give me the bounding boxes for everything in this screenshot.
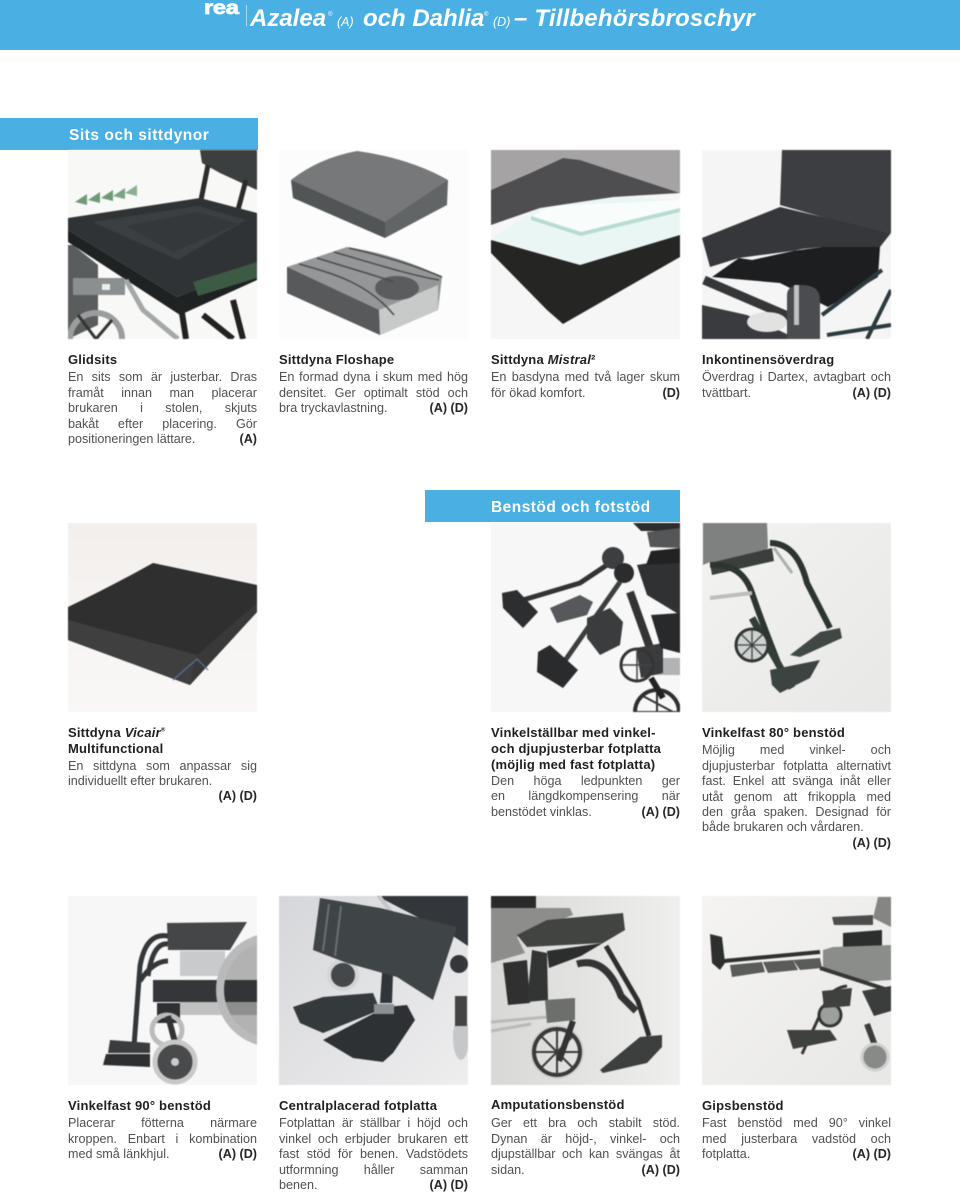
description: (D)	[663, 386, 680, 400]
description: utåt genom att frikoppla med	[702, 790, 891, 804]
photo: 90 degree legrest	[102, 921, 258, 1085]
description: både brukaren och vårdaren.	[702, 820, 864, 834]
description: (A) (D)	[430, 401, 468, 415]
description: utformning håller samman	[279, 1163, 468, 1177]
description	[702, 743, 891, 850]
description: bakåt efter placering. Gör	[68, 417, 257, 431]
title: ®	[328, 12, 332, 18]
panel: Gipsbenstöd	[702, 896, 892, 1161]
title: (D)	[493, 15, 510, 29]
photo: foam cushions	[286, 150, 449, 336]
description: för ökad komfort.	[491, 386, 586, 400]
description: fast stöd för benen. Vadstödets	[279, 1147, 468, 1161]
description: Möjlig med vinkel- och	[702, 743, 891, 757]
heading: Inkontinensöverdrag	[702, 352, 834, 367]
photo: dark cushion	[67, 523, 258, 708]
heading: Sittdyna Floshape	[279, 352, 394, 367]
heading line 3: (möjlig med fast fotplatta)	[491, 757, 655, 772]
photo: 80 degree legrest	[702, 522, 891, 712]
description: djupjusterbar fotplatta alternativt	[702, 759, 891, 773]
panel: Glidsits	[67, 149, 258, 446]
title: (A)	[337, 15, 354, 29]
panel: Sittdyna Mistral	[490, 150, 681, 400]
description: kroppen. Enbart i kombination	[68, 1132, 257, 1146]
header band	[0, 0, 960, 50]
heading: Amputationsbenstöd	[491, 1097, 625, 1112]
photo: central footplate	[278, 895, 469, 1086]
description: (A) (D)	[219, 1147, 257, 1161]
description: (A) (D)	[642, 805, 680, 819]
heading: Sittdyna Vicair®	[68, 725, 165, 740]
panel: Sittdyna Vicair	[67, 523, 258, 803]
section heading: Sits och sittdynor: Sits och sittdynor	[69, 127, 209, 144]
description: En sits som är justerbar. Dras	[68, 370, 257, 384]
description: en längdkompensering när	[491, 789, 680, 803]
heading: Glidsits	[68, 352, 117, 367]
section heading: Benstöd och fotstöd	[425, 490, 680, 522]
heading: Vinkelfast 80° benstöd	[702, 725, 845, 740]
photo: amputation support	[490, 895, 680, 1086]
description: En formad dyna i skum med hög	[279, 370, 468, 384]
description	[279, 370, 468, 415]
description: brukaren i stolen, skjuts	[68, 401, 257, 415]
description	[702, 370, 891, 400]
title	[250, 5, 756, 32]
description: benen.	[279, 1178, 318, 1192]
description: med justerbara vadstöd och	[702, 1132, 891, 1146]
title: Azalea	[250, 5, 326, 32]
title: och Dahlia	[363, 5, 484, 32]
logo divider	[246, 5, 247, 26]
heading: Vinkelfast 90° benstöd	[68, 1098, 211, 1113]
description: individuellt efter brukaren.	[68, 774, 212, 788]
description: (A)	[240, 432, 257, 446]
photo: sliding seat	[67, 149, 258, 340]
panel: Sittdyna Floshape	[279, 150, 468, 415]
title: – Tillbehörsbroschyr	[514, 5, 755, 32]
description	[68, 759, 257, 803]
section heading: Sits och sittdynor	[0, 118, 258, 150]
description	[491, 1116, 680, 1177]
panel: Amputationsbenstöd	[490, 895, 680, 1177]
description: En sittdyna som anpassar sig	[68, 759, 257, 773]
description: tvättbart.	[702, 386, 751, 400]
description: Fotplattan är ställbar i höjd och	[279, 1116, 468, 1130]
description: vinkel och erbjuder brukaren ett	[279, 1132, 468, 1146]
photo: base cushion with cover	[490, 150, 681, 338]
description: (A) (D)	[642, 1163, 680, 1177]
description	[68, 370, 257, 446]
title: ®	[484, 12, 488, 18]
heading: Gipsbenstöd	[702, 1098, 784, 1113]
description: fast. Enkel att svänga inåt eller	[702, 774, 891, 788]
description: densitet. Ger optimalt stöd och	[279, 386, 468, 400]
description: bra tryckavlastning.	[279, 401, 388, 415]
description	[702, 1116, 891, 1161]
panel: Vinkelfast 80° benstöd	[702, 522, 891, 850]
description	[279, 1116, 468, 1192]
description: Överdrag i Dartex, avtagbart och	[702, 370, 891, 384]
description: En basdyna med två lager skum	[491, 370, 680, 384]
description: (A) (D)	[219, 789, 257, 803]
photo: elevating legrests	[501, 522, 681, 713]
heading: Centralplacerad fotplatta	[279, 1098, 437, 1113]
heading line 2: och djupjusterbar fotplatta	[491, 741, 661, 756]
description: benstödet vinklas.	[491, 805, 592, 819]
description: fotplatta.	[702, 1147, 750, 1161]
description: Dynan är höjd-, vinkel- och	[491, 1132, 680, 1146]
description: (A) (D)	[853, 836, 891, 850]
description: positioneringen lättare.	[68, 432, 195, 446]
description: den gråa spaken. Designad för	[702, 805, 891, 819]
panel: Vinkelställbar benstöd	[491, 522, 681, 819]
photo: cast legrest	[702, 896, 892, 1085]
description: Ger ett bra och stabilt stöd.	[491, 1116, 680, 1130]
description	[491, 370, 680, 400]
heading line 2: Multifunctional	[68, 741, 163, 756]
heading: Vinkelställbar med vinkel-	[491, 725, 656, 740]
description: Fast benstöd med 90° vinkel	[702, 1116, 891, 1130]
photo: incontinence cover on seat	[701, 149, 892, 340]
description: (A) (D)	[853, 1147, 891, 1161]
description: (A) (D)	[853, 386, 891, 400]
heading: Sittdyna Mistral²	[491, 352, 596, 367]
description	[68, 1116, 257, 1161]
panel: Centralplacerad fotplatta	[278, 895, 469, 1192]
description: framåt innan man placerar	[68, 386, 257, 400]
panel: Inkontinensöverdrag	[701, 149, 892, 400]
panel: Vinkelfast 90° benstöd	[68, 921, 258, 1161]
description: sidan.	[491, 1163, 525, 1177]
section heading: Benstöd och fotstöd: Benstöd och fotstöd	[491, 499, 651, 516]
description: djupställbar och kan svängas åt	[491, 1147, 680, 1161]
description	[491, 774, 680, 819]
description: med små länkhjul.	[68, 1147, 170, 1161]
description: Placerar fötterna närmare	[68, 1116, 257, 1130]
description: Den höga ledpunkten ger	[491, 774, 680, 788]
description: (A) (D)	[430, 1178, 468, 1192]
